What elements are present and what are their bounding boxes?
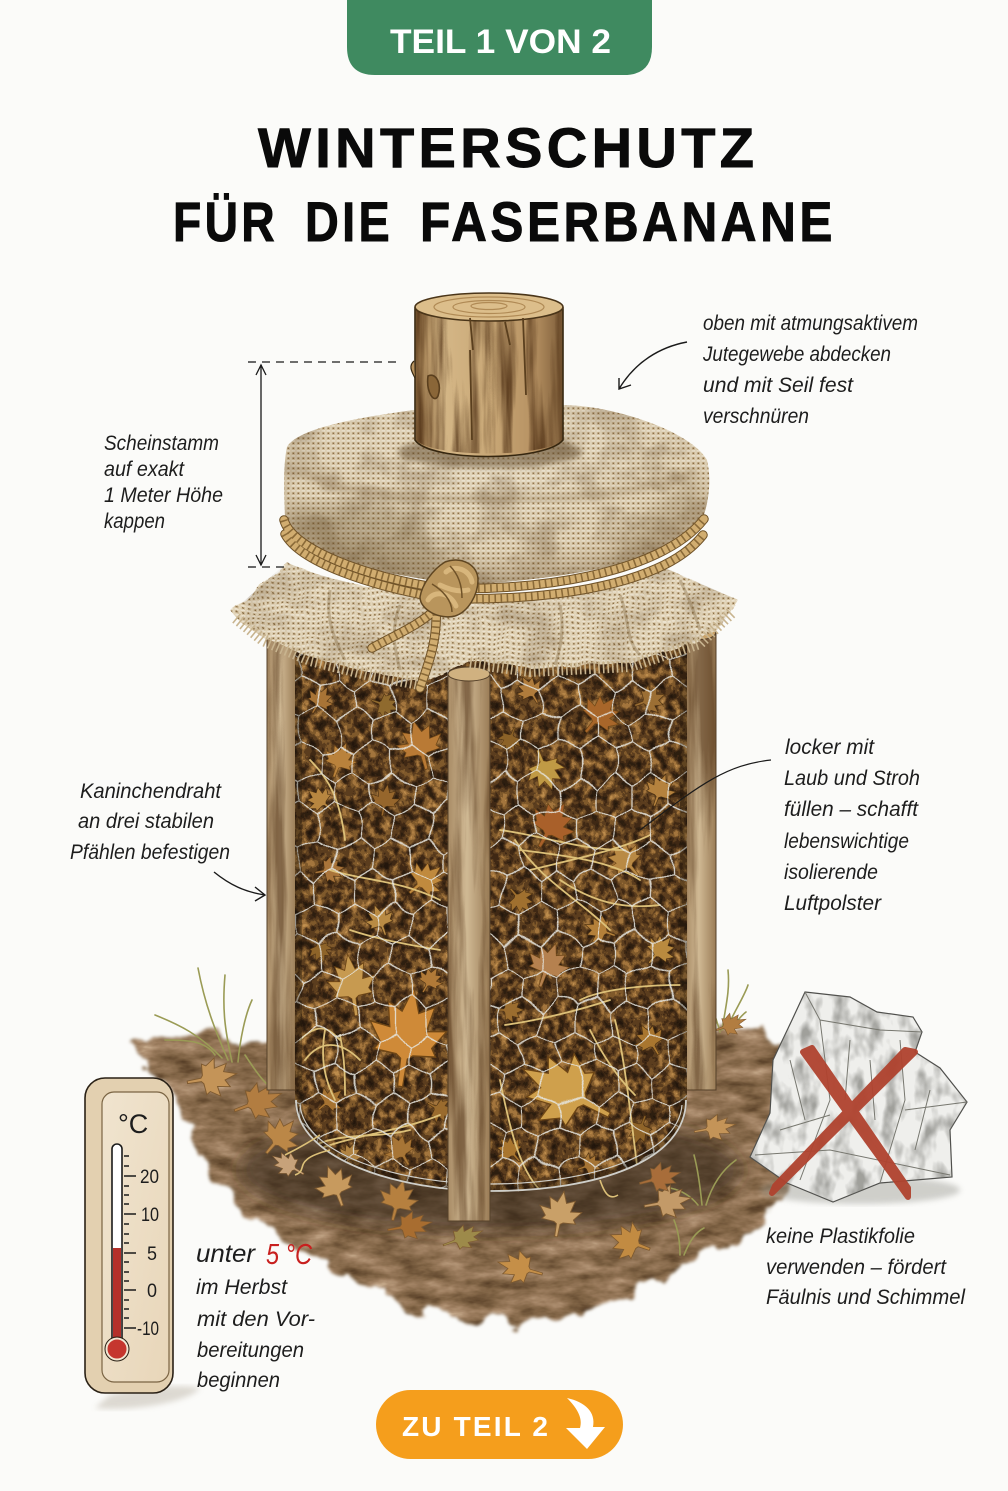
front centre wooden post (448, 667, 490, 1221)
note: filling: Laub und Stroh (784, 767, 920, 790)
note: filling: Luftpolster (784, 892, 882, 915)
note: filling: locker mit (785, 736, 875, 759)
title: FASERBANANE (420, 190, 836, 253)
icon: thermometer: 0 (147, 1281, 157, 1302)
note: jute cover: und mit Seil fest (703, 374, 854, 397)
note: no plastic film (766, 1225, 966, 1309)
note: cut trunk: auf exakt (104, 458, 185, 481)
note: start below 5 degrees: mit den Vor- (197, 1308, 315, 1331)
top badge: part 1 of 2: TEIL 1 VON 2 (390, 23, 611, 61)
note: filling: füllen – schafft (784, 798, 919, 821)
icon: crossed-out plastic bag (748, 990, 970, 1204)
large leaves in the fill (318, 685, 652, 1173)
leader line: to filling (640, 760, 771, 830)
button: to part 2 (376, 1390, 623, 1459)
height dimension marker (248, 362, 400, 567)
note: no plastic film: verwenden – fördert (766, 1256, 947, 1279)
small leaf litter (300, 670, 683, 1181)
ground leaves (184, 1009, 750, 1290)
top badge: part 1 of 2 (347, 0, 652, 75)
note: jute cover: oben mit atmungsaktivem (703, 312, 918, 335)
icon: thermometer: 5 (147, 1244, 157, 1265)
note: no plastic film: Fäulnis und Schimmel (766, 1286, 966, 1309)
note: start below 5 degrees: beginnen (197, 1369, 280, 1392)
rope with knot (284, 519, 704, 688)
icon: thermometer: 20 (140, 1167, 159, 1188)
title: DIE (305, 190, 393, 253)
arrow: to wire post (214, 872, 265, 901)
note: jute cover: verschnüren (703, 405, 809, 428)
note: jute cover (702, 312, 918, 428)
burlap frill (232, 562, 738, 685)
tree trunk cut to one metre (411, 293, 563, 456)
illustration: ground with fallen leaves (135, 968, 800, 1321)
note: rabbit wire: an drei stabilen (78, 810, 214, 833)
title (173, 116, 836, 253)
note: cut trunk: kappen (104, 510, 165, 533)
icon: thermometer: -10 (137, 1319, 159, 1340)
title: WINTERSCHUTZ (258, 116, 754, 179)
cylinder edge shading (295, 640, 687, 1192)
button: to part 2: ZU TEIL 2 (402, 1411, 548, 1442)
note: filling (784, 736, 920, 915)
note: start below 5 degrees: 5 °C (266, 1239, 313, 1271)
note: jute cover: Jutegewebe abdecken (702, 343, 891, 366)
note: start below 5 degrees (196, 1239, 315, 1392)
note: cut trunk: 1 Meter Höhe (104, 484, 223, 507)
icon: thermometer: 10 (141, 1205, 159, 1226)
wire cylinder filled with leaves and straw (284, 644, 687, 1198)
note: start below 5 degrees: unter (196, 1240, 257, 1268)
note: start below 5 degrees: bereitungen (197, 1339, 304, 1362)
note: cut trunk (104, 432, 223, 533)
note: filling: lebenswichtige (784, 830, 909, 853)
grass tufts (155, 968, 748, 1255)
note: filling: isolierende (784, 861, 878, 884)
straw strands (295, 760, 680, 1190)
note: start below 5 degrees: im Herbst (196, 1276, 288, 1299)
back-right wooden post (684, 626, 716, 1090)
icon: thermometer: °C (118, 1109, 148, 1139)
icon: curved down arrow (566, 1398, 605, 1449)
note: rabbit wire (70, 780, 230, 864)
note: rabbit wire: Kaninchendraht (80, 780, 222, 803)
burlap crown (284, 405, 710, 584)
note: cut trunk: Scheinstamm (104, 432, 219, 455)
note: rabbit wire: Pfählen befestigen (70, 841, 230, 864)
note: no plastic film: keine Plastikfolie (766, 1225, 915, 1248)
title: FÜR (173, 190, 278, 253)
arrow: to jute cover (619, 342, 687, 389)
icon: thermometer (85, 1078, 200, 1409)
irregular chicken wire (295, 653, 687, 1192)
back-left wooden post (267, 630, 296, 1090)
